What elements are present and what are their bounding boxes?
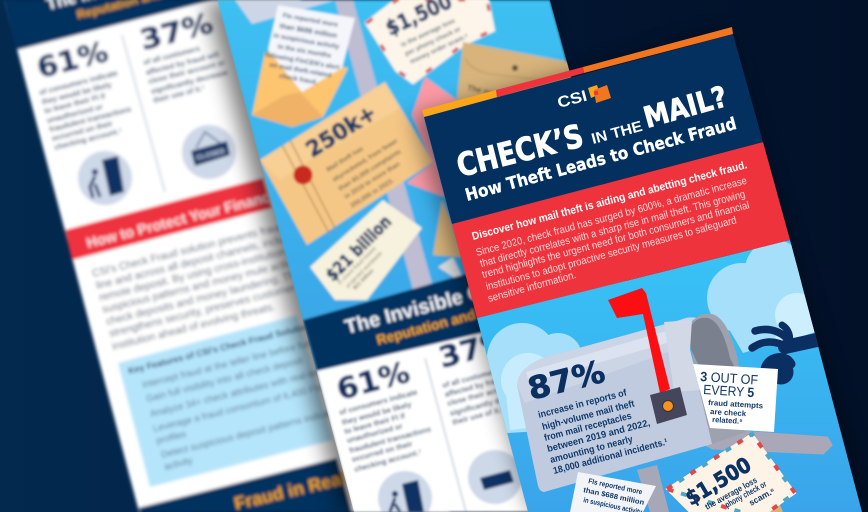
stamp: $1,500: phony check or — [723, 478, 769, 510]
left cloud — [487, 323, 580, 433]
body paragraph: check deposits and money laundering. This — [105, 267, 303, 328]
middle page stat 37%: affected by fraud will — [444, 371, 519, 399]
note $21 billion — [310, 200, 422, 300]
kraft envelope 250k+: than 60,000 complaints — [337, 148, 403, 193]
middle page stat 61%: checking account.⁷ — [353, 447, 423, 474]
open mailbox door — [703, 430, 831, 453]
mailbox body — [517, 314, 746, 492]
note: $688 million: FIs reported more — [588, 476, 643, 496]
left page stat 61%: occurred on their — [51, 119, 114, 143]
stat 87% — [528, 360, 668, 474]
middle page header band — [302, 273, 558, 372]
title: CHECK’S — [453, 117, 587, 185]
key features box: Gain full visibility into all check deposit — [145, 355, 304, 405]
kraft envelope 250k+: in 2019 to more than — [343, 161, 401, 201]
shadow of front page — [412, 30, 868, 512]
kraft envelope 250k+ — [260, 82, 433, 245]
open envelope with letter: check fraud. — [279, 73, 318, 86]
key features box: profiles — [155, 429, 188, 447]
red intro section: Since 2020, check fraud has surged by 600%, a dramatic increase — [475, 175, 748, 259]
stamp $1,500 top — [367, 0, 493, 82]
mailbox latch — [650, 387, 687, 424]
middle page stat 37%: 37% — [435, 323, 515, 375]
note: 3 out of every 5: are check — [710, 407, 747, 418]
stat 87%: high-volume mail theft — [541, 398, 636, 433]
branch — [752, 325, 835, 380]
left page stat 61%: to leave their FI if — [43, 91, 106, 115]
middle page stat 61%: occurred on their — [351, 439, 413, 464]
open envelope with letter: in the six months — [277, 43, 332, 60]
key features box: Key Features of CSI's Check Fraud Solution — [127, 321, 312, 376]
body paragraph: line and across all deposit channels, including — [95, 229, 305, 292]
left page stat 61%: of consumers indicate — [38, 68, 119, 97]
stamp: $1,500: scam.⁶ — [747, 485, 776, 508]
note: 3 out of every 5: related.⁵ — [712, 415, 743, 426]
left page stat 61%: fraudulent transactions — [48, 104, 132, 134]
note: 3 out of every 5 — [693, 364, 778, 432]
left page stat 37%: affected by fraud will — [145, 50, 220, 77]
flag — [608, 288, 670, 393]
stamp $1,500 top: per phony check or — [404, 26, 462, 58]
sky background — [477, 240, 862, 512]
middle page stat 61%: fraudulent transactions — [348, 424, 432, 455]
red heading band: How to Protect Your Financial Future — [85, 174, 335, 252]
kraft envelope top right — [454, 40, 572, 109]
logo — [556, 85, 611, 112]
stat 87%: between 2019 and 2022, — [546, 418, 652, 455]
red intro section: sensitive information. — [487, 269, 577, 305]
icon: door — [378, 471, 432, 512]
middle page stat 37%: significantly decrease — [449, 389, 528, 418]
middle page stat 37%: close their account or — [446, 379, 525, 408]
note: $688 million — [570, 472, 656, 512]
body paragraph — [91, 207, 339, 353]
body paragraph: suspicious patterns and money mule activity — [101, 254, 304, 316]
left page stat 61%: checking account.⁷ — [53, 126, 123, 152]
body paragraph: CSI's Check Fraud solution prevents fraud at the teller — [91, 207, 339, 280]
middle page stat 37%: of all customers — [441, 366, 500, 390]
left page stat 61% — [34, 35, 132, 152]
panel: middle page — [217, 0, 626, 512]
left page stat 37% — [137, 7, 229, 105]
key features box — [118, 315, 345, 487]
left page stat 37%: significantly decrease — [150, 68, 229, 96]
icon: closed sign: CLOSED — [196, 148, 226, 162]
middle page stat 37% — [438, 334, 502, 426]
stat 87%: from mail receptacles — [543, 411, 633, 444]
left page lower band — [138, 458, 352, 512]
note: 3 out of every 5: 3 OUT OF — [700, 369, 759, 388]
title: IN THE — [590, 118, 644, 148]
kraft fragment — [770, 505, 783, 512]
red intro section: that directly correlates with a sharp rise in mail theft. This growing — [479, 188, 747, 270]
key features box: Leverage a fraud consortium of 6,400 FIs — [152, 382, 324, 435]
middle page stat 61%: to leave their FI if — [343, 411, 406, 436]
middle page stat 61% — [333, 355, 432, 474]
left page header band — [4, 0, 266, 50]
note: 3 out of every 5: fraud attempts — [708, 398, 763, 410]
open envelope with letter: FIs reported more — [282, 12, 339, 29]
panel: front page — [422, 27, 862, 512]
illustration clouds and mailbox — [477, 240, 835, 512]
key features box: Analyze 34+ check attributes with real-time — [149, 365, 327, 420]
stat 87%: 18,000 additional incidents.¹ — [552, 437, 669, 477]
stat 87%: increase in reports of — [537, 387, 629, 421]
stamp $1,500 top: is the average loss — [400, 17, 457, 49]
note $21 billion: $21 billion — [352, 268, 376, 291]
gray note — [235, 0, 336, 24]
left page stat 61%: unauthorized or — [46, 102, 104, 125]
key features box: Intercept fraud at the teller line before funds — [141, 336, 322, 391]
logo: CSI — [556, 88, 589, 112]
shadow of middle page — [205, 0, 680, 512]
body paragraph: institution ahead of evolving threats. — [111, 301, 276, 353]
key features box: Detect suspicious deposit patterns indicating — [160, 405, 345, 461]
stamp: $1,500: $1,500 — [681, 453, 755, 510]
stat 87%: 87% — [524, 354, 609, 408]
open envelope with letter — [252, 5, 355, 127]
stat 87%: amounting to nearly — [549, 434, 635, 466]
note $21 billion: $21 billion — [322, 212, 396, 286]
middle page stat 37%: their use of it.⁷ — [451, 405, 505, 427]
left page stat 37%: their use of it.⁷ — [152, 83, 206, 105]
wax seal — [294, 166, 312, 184]
stamp $1,500 top: money order scam.⁶ — [409, 33, 469, 66]
title: MAIL? — [640, 79, 731, 135]
middle page header band: Reputation and Relationships — [375, 281, 570, 348]
mailbox post — [335, 0, 432, 290]
red intro section: Discover how mail theft is aiding and abetting check fraud. — [471, 159, 748, 243]
kraft envelope 250k+: Mail theft has — [325, 145, 365, 174]
red intro section — [452, 142, 790, 318]
key features box: activity — [163, 455, 194, 473]
post — [637, 465, 669, 512]
left page stat 37%: of all customers — [142, 44, 201, 67]
kraft envelope top right: The number of — [467, 83, 523, 104]
middle page stat 61%: of consumers indicate — [338, 387, 418, 417]
kraft envelope 250k+: 250,000 in 2023. — [349, 177, 395, 210]
red intro section: institutions to adopt proactive security measures to safeguard — [485, 214, 738, 293]
body paragraph: strengthens security, preserves customer trust — [108, 276, 319, 340]
right cloud — [707, 240, 819, 353]
pink envelope — [407, 77, 462, 197]
kraft lower fragment — [433, 200, 462, 257]
navy title section — [424, 34, 763, 224]
top color stripe — [422, 27, 733, 117]
open envelope with letter: in suspicious activity — [273, 32, 340, 51]
middle page header band: The Invisible Cost of Fraud: — [343, 249, 603, 339]
note: $688 million: than $688 million — [583, 485, 645, 507]
red intro section: trend highlights the urgent need for both consumers and financial — [481, 199, 751, 281]
open envelope with letter: than $688 million — [279, 21, 338, 40]
icon: walking out of door — [78, 151, 132, 205]
open envelope with letter: following FinCEN's alert — [264, 52, 341, 72]
note $21 billion: in check fraud losses — [337, 246, 378, 286]
open envelope with letter: on mail theft-related — [269, 62, 332, 79]
stamp: $1,500 — [667, 434, 795, 512]
panel: back left page — [4, 0, 450, 512]
middle page stat 61%: 61% — [333, 355, 413, 407]
left page stat 61%: 61% — [34, 35, 111, 85]
note: 3 out of every 5: EVERY 5 — [703, 382, 755, 400]
icon: closed sign — [468, 450, 522, 504]
note $21 billion: projected worldwide — [345, 251, 384, 289]
kraft envelope 250k+: 250k+ — [302, 101, 381, 163]
kraft envelope 250k+: skyrocketed, from fewer — [331, 137, 400, 184]
stamp: $1,500: the average loss — [703, 475, 759, 512]
left page stat 61%: they would be likely — [41, 80, 113, 106]
body paragraph: remote deposit. By using cross-institution data — [98, 240, 309, 304]
middle page stat 61%: they would be likely — [341, 399, 413, 427]
icon: closed sign — [182, 125, 236, 179]
middle page stat 61%: unauthorized or — [346, 421, 403, 445]
title: How Theft Leads to Check Fraud — [463, 114, 739, 206]
left page stat 37%: 37% — [137, 7, 216, 57]
left page stat 37%: close their account or — [147, 58, 226, 86]
